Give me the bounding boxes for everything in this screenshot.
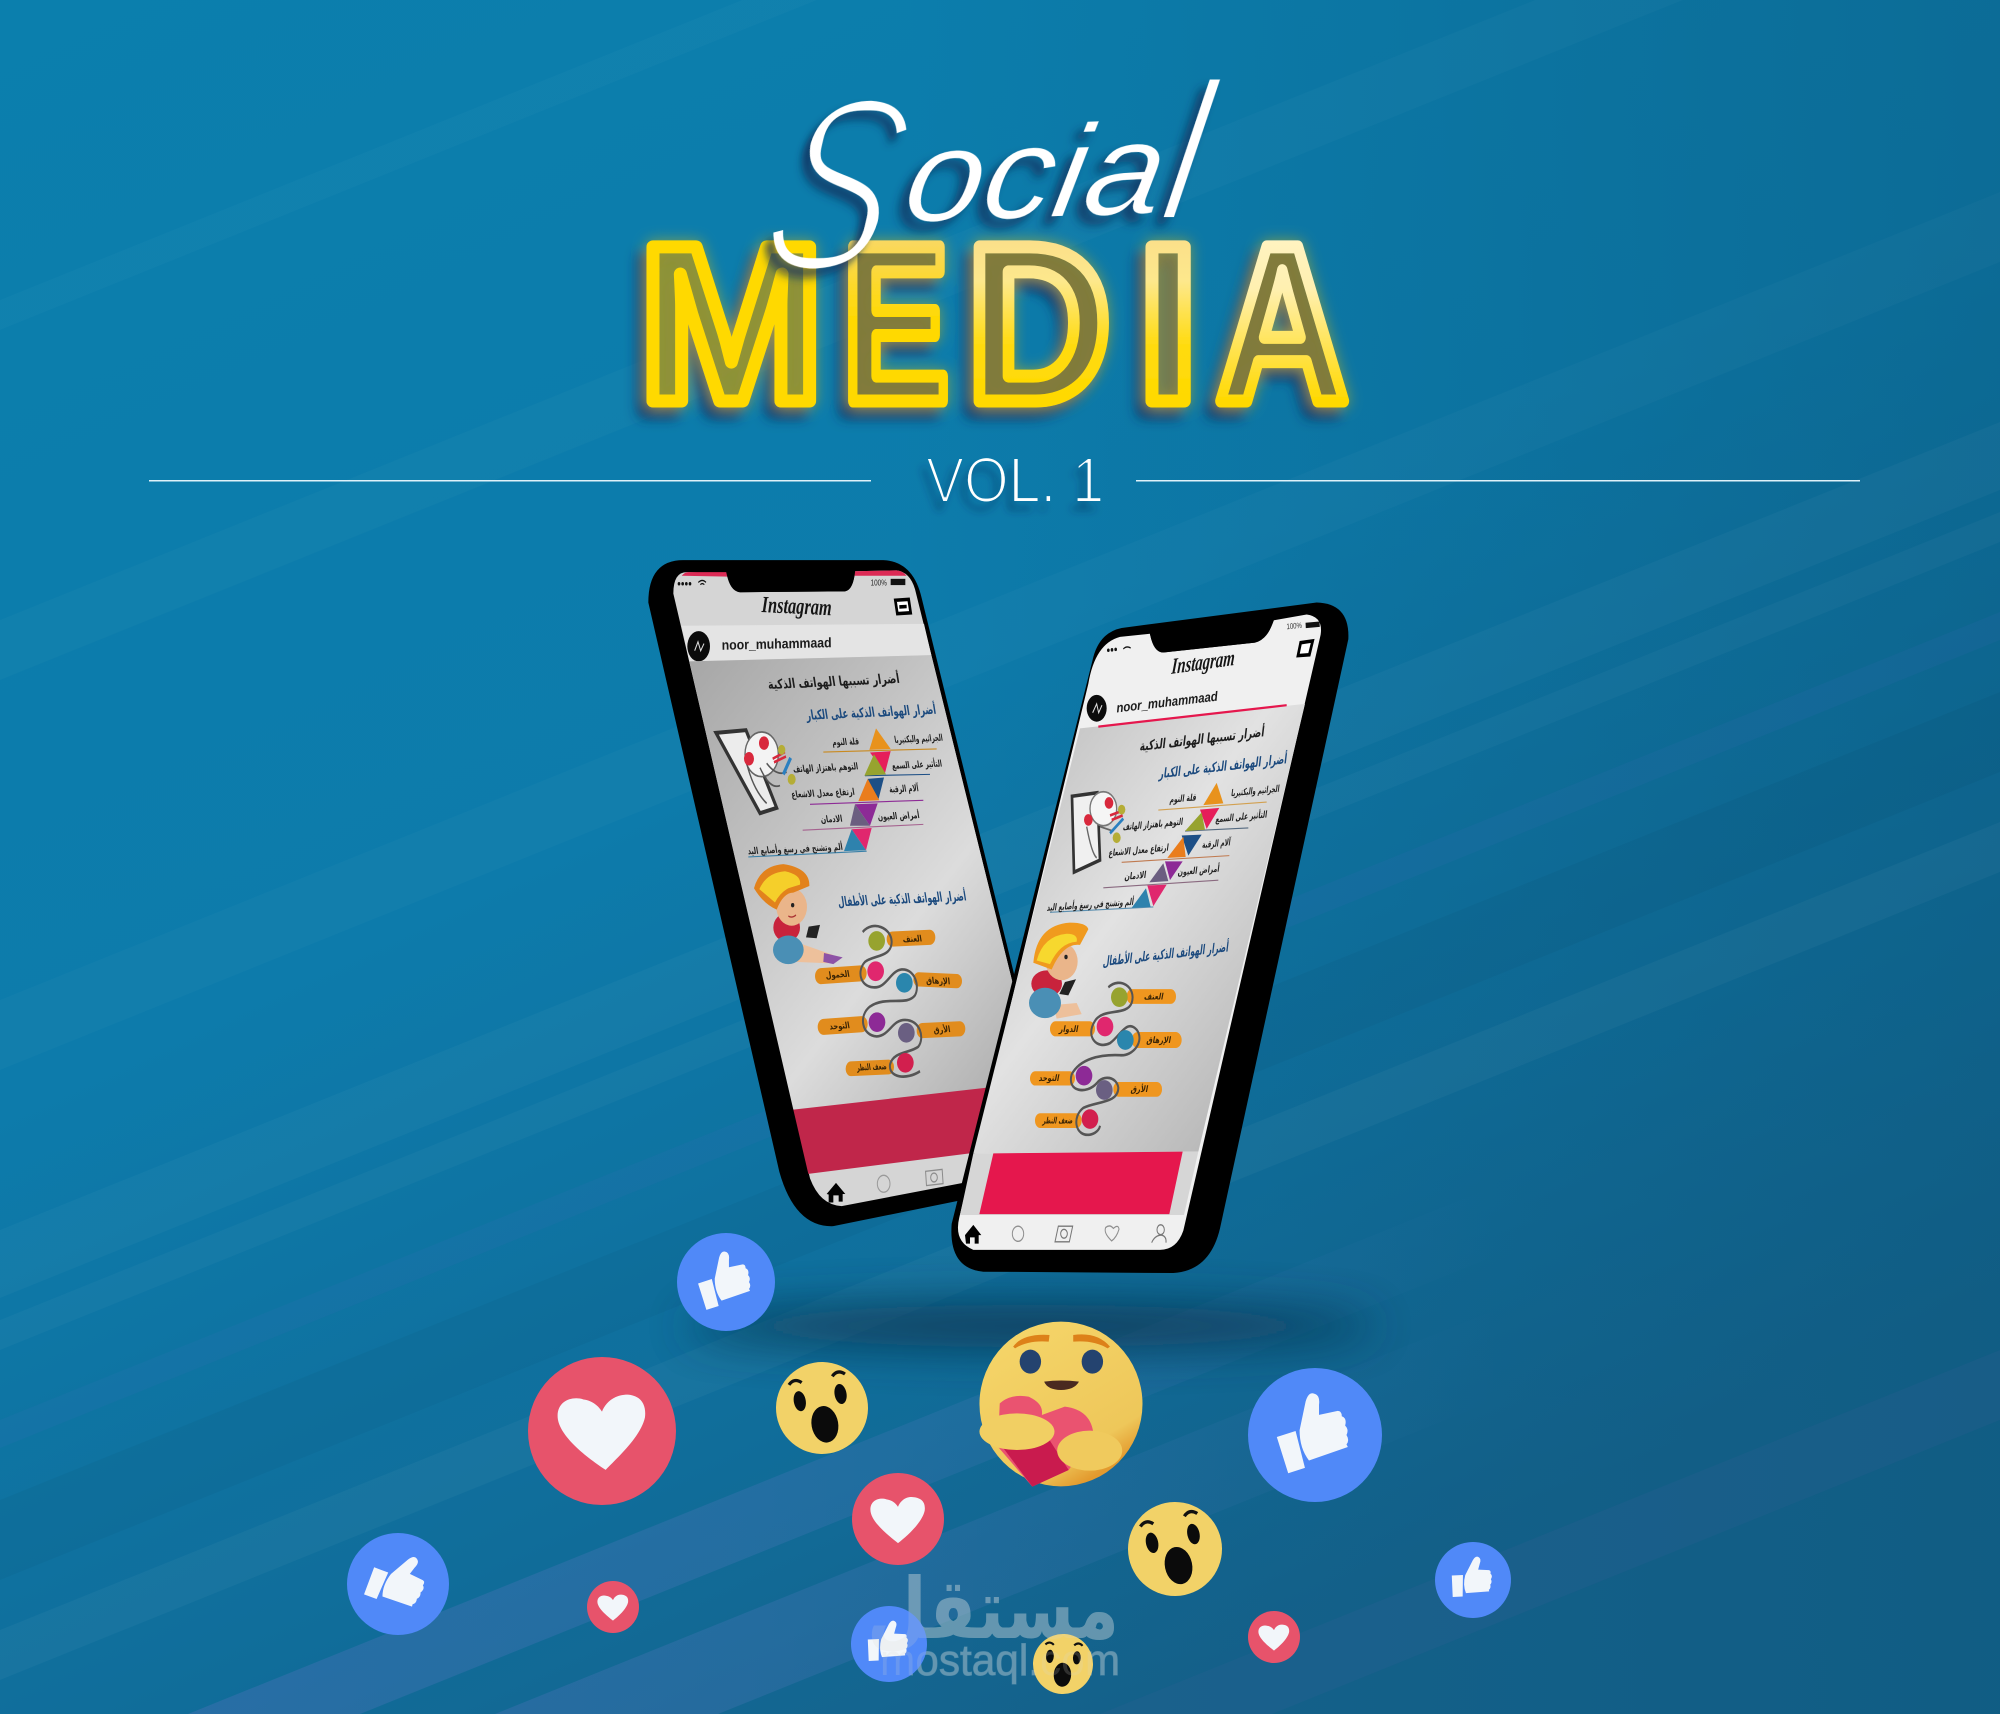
left phone illustration: tablet and head	[716, 730, 796, 813]
right phone harm labels adults: التأثير على السمع	[1215, 807, 1268, 826]
watermark: mostaql: mostaql.com	[880, 1636, 1120, 1685]
reaction: like top	[677, 1233, 775, 1331]
right phone username: noor_muhammaad	[1116, 688, 1219, 716]
right phone harm labels adults: الجراثيم والبكتيريا	[1230, 783, 1280, 800]
right phone headline: أضرار تسببها الهواتف الذكية	[1139, 723, 1266, 755]
right phone harm labels adults: قلة النوم	[1169, 791, 1197, 806]
left phone status bar	[678, 578, 905, 588]
left phone harm labels adults: التوهم باهتزاز الهاتف	[792, 760, 859, 776]
reaction: small heart right	[1248, 1611, 1300, 1663]
right phone harm labels adults: آلام الرقبة	[1201, 835, 1232, 851]
right phone Instagram logo: Instagram	[1170, 646, 1236, 680]
left phone Instagram logo: Instagram	[761, 593, 832, 621]
title: Social	[743, 42, 1230, 323]
right phone triangle infographic	[1050, 783, 1267, 912]
right phone timeline: العنف	[1143, 992, 1165, 1002]
right phone timeline: ضعف النظر	[1041, 1116, 1074, 1126]
left phone timeline: الخمول	[825, 969, 851, 981]
right phone avatar	[1087, 695, 1107, 722]
reaction: heart center	[852, 1473, 944, 1565]
left phone nav icons	[827, 1169, 943, 1203]
right phone timeline: الأرق	[1130, 1083, 1149, 1094]
left phone subhead children: أضرار الهواتف الذكية على الأطفال	[836, 887, 968, 911]
right phone timeline: الإرهاق	[1146, 1035, 1172, 1045]
watermark overlay	[867, 1560, 1120, 1685]
left phone inbox icon	[895, 599, 911, 614]
title: MEDIA: E	[842, 199, 950, 449]
right phone accent line	[1098, 705, 1287, 727]
reaction: like far left	[347, 1533, 449, 1635]
title: Social: S	[743, 46, 932, 323]
right phone status bar: 100%	[1286, 621, 1303, 632]
left phone harm labels adults: قلة النوم	[831, 735, 860, 749]
right phone harm labels adults: الادمان	[1124, 869, 1147, 882]
left phone content sheet	[689, 655, 1047, 1120]
right phone inbox icon	[1298, 641, 1313, 656]
title: MEDIA: M	[638, 199, 825, 449]
left phone harm labels adults: الادمان	[820, 813, 843, 825]
left phone harm labels adults: ألم وتشنج في رسغ وأصابع اليد	[747, 841, 844, 858]
left phone harm labels adults: الجراثيم والبكتيريا	[893, 732, 944, 746]
right phone harm labels adults: ألم وتشنج في رسغ وأصابع اليد	[1046, 895, 1135, 914]
right phone timeline: الدوار	[1058, 1024, 1079, 1034]
right phone harm labels adults: ارتفاع معدل الاشعاع	[1108, 842, 1170, 860]
watermark: mostaql	[867, 1560, 1120, 1685]
reaction: like right large	[1248, 1368, 1382, 1502]
phone floor shadow	[685, 1304, 1375, 1348]
left phone pink block	[793, 1080, 1053, 1174]
right phone harm labels adults	[1046, 783, 1280, 914]
title: MEDIA: I	[1137, 199, 1199, 449]
left phone timeline	[815, 926, 966, 1077]
reaction: wow bottom	[1031, 1632, 1095, 1696]
title: MEDIA: D	[966, 199, 1112, 449]
right phone timeline	[1030, 983, 1182, 1135]
reaction: big heart	[528, 1357, 676, 1505]
left phone	[648, 560, 1053, 1226]
right phone boy illustration	[1029, 923, 1088, 1019]
right phone pink block	[979, 1152, 1183, 1214]
subtitle: VOL. 1: VOL. 1	[926, 444, 1104, 516]
right phone lower band	[960, 1152, 1198, 1215]
right phone harm labels adults: أمراض العيون	[1177, 861, 1221, 879]
right phone subhead adults: أضرار الهواتف الذكية على الكبار	[1158, 750, 1288, 783]
reaction: wow right	[1119, 1493, 1231, 1605]
left phone timeline: ضعف النظر	[855, 1061, 887, 1073]
watermark: mostaql: مستقل	[867, 1560, 1119, 1658]
watermark overlay: mostaql.com	[880, 1636, 1120, 1685]
left phone triangle infographic	[748, 728, 937, 857]
title: Social: l	[1150, 42, 1230, 263]
title: MEDIA: A	[1216, 200, 1349, 449]
right phone content sheet	[973, 704, 1305, 1153]
left phone harm labels adults	[747, 732, 944, 858]
right phone notch	[1149, 617, 1275, 653]
reaction: care emoji	[979, 1322, 1142, 1487]
left phone avatar	[687, 631, 710, 661]
left phone screen	[673, 570, 1047, 1206]
title: Social: ocia	[895, 95, 1179, 250]
right phone illustration: tablet and head	[1072, 792, 1125, 872]
watermark overlay: مستقل	[867, 1560, 1119, 1658]
left phone harm labels adults: التأثير على السمع	[891, 758, 943, 772]
left phone harm labels adults: أمراض العيون	[877, 809, 920, 823]
right phone timeline: التوحد	[1038, 1073, 1061, 1083]
right phone body	[951, 603, 1348, 1273]
title: MEDIA	[638, 199, 1349, 449]
left phone harm labels adults: آلام الرقبة	[888, 781, 920, 796]
reaction: wow left	[769, 1355, 875, 1461]
right phone	[951, 603, 1348, 1273]
right phone nav icons	[965, 1225, 1166, 1244]
left phone harm labels adults: ارتفاع معدل الاشعاع	[790, 786, 856, 801]
left phone top pink strips	[682, 570, 907, 577]
reaction: like bottom center	[842, 1597, 936, 1691]
left phone notch	[726, 569, 855, 592]
divider right	[1136, 480, 1860, 482]
right phone screen	[958, 615, 1321, 1250]
left phone boy illustration	[754, 864, 843, 964]
left phone headline: أضرار تسببها الهواتف الذكية	[766, 669, 901, 694]
left phone timeline: الأرق	[932, 1023, 951, 1035]
left phone user band	[682, 624, 931, 661]
left phone timeline: التوحد	[828, 1020, 851, 1032]
left phone timeline: الإرهاق	[925, 975, 951, 987]
divider left	[149, 480, 871, 482]
right phone subhead children: أضرار الهواتف الذكية على الأطفال	[1102, 938, 1230, 971]
reaction: like far right	[1426, 1533, 1520, 1627]
left phone timeline: العنف	[902, 933, 923, 944]
left phone body	[648, 560, 1053, 1226]
left phone subhead adults: أضرار الهواتف الذكية على الكبار	[804, 700, 937, 724]
reaction: small heart left	[587, 1581, 639, 1633]
right phone status bar	[1107, 621, 1320, 652]
left phone status bar: 100%	[871, 578, 887, 588]
right phone harm labels adults: التوهم باهتزاز الهاتف	[1122, 816, 1184, 834]
left phone username: noor_muhammaad	[722, 635, 832, 653]
